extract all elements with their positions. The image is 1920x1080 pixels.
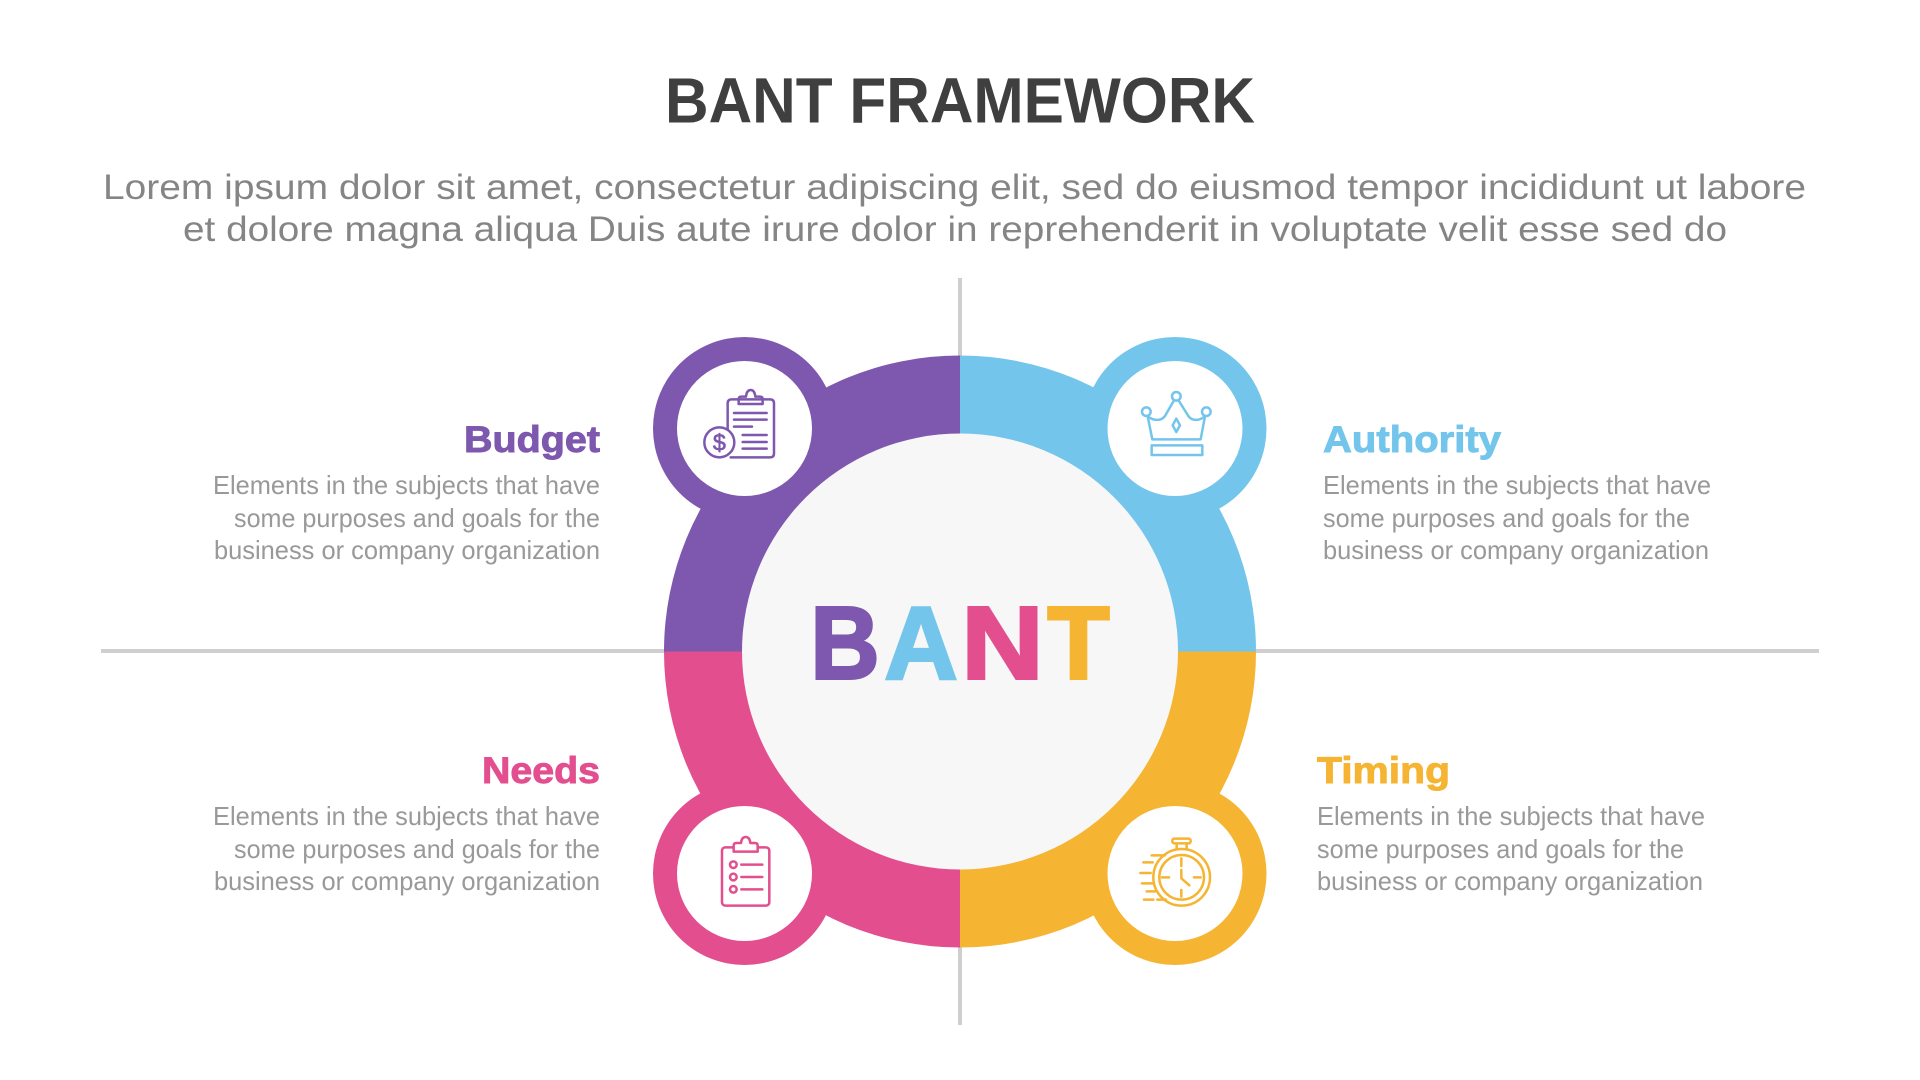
- text block: timing: [1317, 750, 1705, 896]
- segment: timing: [960, 652, 1266, 965]
- text block: authority: some purposes and goals for the: [1323, 503, 1690, 533]
- text block: needs: Needs: [482, 750, 600, 791]
- icon disc: needs: [677, 806, 812, 941]
- center word BANT: [810, 586, 1110, 700]
- text block: timing: some purposes and goals for the: [1317, 834, 1684, 864]
- text block: authority: Elements in the subjects that have: [1323, 470, 1711, 500]
- central ring diagram: [653, 337, 1266, 965]
- text block: authority: [1323, 419, 1711, 565]
- segment: budget: [653, 337, 960, 652]
- text block: budget: Budget: [464, 419, 600, 460]
- center word BANT: N: [962, 586, 1044, 700]
- icon: authority crown: [1142, 392, 1211, 455]
- text block: budget: business or company organization: [214, 535, 600, 565]
- axis lines: [101, 278, 1819, 1025]
- icon: needs checklist: [722, 837, 769, 906]
- icon disc: timing: [1108, 806, 1242, 941]
- text block: authority: Authority: [1323, 419, 1501, 460]
- icon: budget clipboard with coin: [704, 390, 774, 457]
- center word BANT: B: [810, 586, 880, 700]
- icon disc: budget: [677, 361, 812, 496]
- inner circle: [742, 434, 1178, 870]
- text block: needs: Elements in the subjects that have: [213, 801, 600, 831]
- title: BANT FRAMEWORK: [665, 64, 1255, 136]
- text block: budget: Elements in the subjects that have: [213, 470, 600, 500]
- text block: budget: [213, 419, 600, 565]
- text block: authority: business or company organization: [1323, 535, 1709, 565]
- icon: budget clipboard with coin: $: [713, 430, 726, 456]
- center word BANT: T: [1048, 586, 1110, 700]
- text block: budget: some purposes and goals for the: [234, 503, 600, 533]
- text block: timing: Elements in the subjects that have: [1317, 801, 1705, 831]
- icon disc: authority: [1108, 361, 1242, 496]
- text block: needs: some purposes and goals for the: [234, 834, 600, 864]
- subtitle: [103, 168, 1806, 249]
- text block: needs: [213, 750, 600, 896]
- center word BANT: A: [884, 586, 958, 700]
- subtitle: et dolore magna aliqua Duis aute irure dolor in reprehenderit in voluptate velit esse sed do: [183, 210, 1727, 249]
- text block: timing: business or company organization: [1317, 866, 1703, 896]
- segment: needs: [653, 652, 960, 965]
- text block: needs: business or company organization: [214, 866, 600, 896]
- subtitle: Lorem ipsum dolor sit amet, consectetur adipiscing elit, sed do eiusmod tempor incididunt ut labore: [103, 168, 1806, 207]
- text block: timing: Timing: [1317, 750, 1450, 791]
- segment: authority: [960, 337, 1266, 652]
- icon: timing stopwatch: [1140, 839, 1210, 906]
